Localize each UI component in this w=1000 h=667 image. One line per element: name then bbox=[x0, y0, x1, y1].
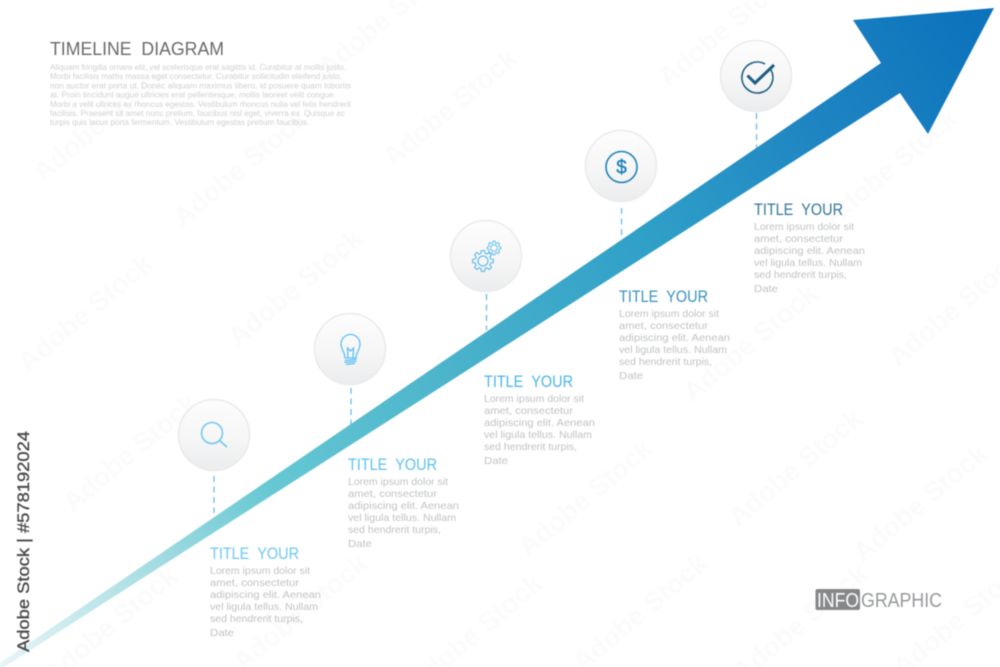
step 5: check: TITLE YOUR bbox=[754, 200, 843, 219]
background watermark: Adobe Stock bbox=[222, 223, 369, 352]
background watermark: Adobe Stock bbox=[12, 248, 159, 377]
step 1: search: TITLE YOUR bbox=[210, 544, 299, 563]
step 4: money: sed hendrerit turpis, bbox=[619, 356, 712, 368]
background watermark: Adobe Stock bbox=[167, 103, 314, 232]
step 1: search: amet, consectetur bbox=[210, 577, 300, 589]
step 1: search: Lorem ipsum dolor sit bbox=[210, 565, 310, 577]
step 2: idea: vel ligula tellus. Nullam bbox=[348, 512, 456, 524]
step 3: gears: TITLE YOUR bbox=[484, 372, 573, 391]
step 3: gears: Date bbox=[484, 455, 508, 467]
step 1: search: Date bbox=[210, 627, 234, 639]
infographic logo: GRAPHIC bbox=[861, 590, 942, 612]
step 1: search: adipiscing elit. Aenean bbox=[210, 589, 321, 601]
intro paragraph: non auctor erat porta ut. Donec aliquam maximus libero, id posuere quam lobortis bbox=[50, 81, 351, 90]
step 3: gears bbox=[450, 220, 595, 467]
step 5: check: Date bbox=[754, 283, 778, 295]
step 2: idea: Date bbox=[348, 538, 372, 550]
step 5: check: amet, consectetur bbox=[754, 233, 844, 245]
step 5: check bbox=[720, 40, 865, 295]
step 2: idea bbox=[314, 314, 459, 550]
step 1: search: vel ligula tellus. Nullam bbox=[210, 601, 318, 613]
step 2: idea: TITLE YOUR bbox=[348, 455, 437, 474]
infographic logo: INFO bbox=[817, 590, 859, 612]
icon: check mark bbox=[742, 62, 774, 93]
step 4: money: adipiscing elit. Aenean bbox=[619, 332, 730, 344]
step 4: money: TITLE YOUR bbox=[619, 287, 708, 306]
step 3: gears: sed hendrerit turpis, bbox=[484, 441, 577, 453]
intro paragraph: Morbi facilisis mattis massa eget consectetur. Curabitur sollicitudin eleifend justo, bbox=[50, 72, 342, 81]
step 4: money: Lorem ipsum dolor sit bbox=[619, 308, 719, 320]
step 5: check: sed hendrerit turpis, bbox=[754, 269, 847, 281]
intro paragraph: Aliquam fringilla ornare elit, vel scelerisque erat sagittis id. Curabitur at mollis justo. bbox=[50, 63, 346, 72]
background watermark: Adobe Stock bbox=[512, 433, 659, 562]
intro paragraph: turpis quis lacus porta fermentum. Vestibulum egestas pretium faucibus. bbox=[50, 118, 309, 127]
step 5: check: adipiscing elit. Aenean bbox=[754, 245, 865, 257]
title: TIMELINE DIAGRAM bbox=[50, 39, 224, 59]
step 3: gears: adipiscing elit. Aenean bbox=[484, 417, 595, 429]
step 3: gears: Lorem ipsum dolor sit bbox=[484, 393, 584, 405]
icon: light bulb bbox=[341, 334, 360, 364]
step 2: idea: sed hendrerit turpis, bbox=[348, 524, 441, 536]
step 1: search: sed hendrerit turpis, bbox=[210, 613, 303, 625]
background watermark: Adobe Stock bbox=[27, 58, 174, 187]
step 2: idea: adipiscing elit. Aenean bbox=[348, 500, 459, 512]
step 3: gears: amet, consectetur bbox=[484, 405, 574, 417]
intro paragraph: facilisis. Praesent sit amet nunc pretium, faucibus nisl eget, viverra ex. Quisque ac bbox=[50, 109, 345, 118]
background watermark: Adobe Stock bbox=[722, 403, 869, 532]
step 4: money: amet, consectetur bbox=[619, 320, 709, 332]
intro paragraph bbox=[50, 63, 352, 127]
step 3: gears: vel ligula tellus. Nullam bbox=[484, 429, 592, 441]
background watermark: Adobe Stock bbox=[847, 438, 994, 567]
background watermark: Adobe Stock bbox=[377, 43, 524, 172]
step 2: idea: Lorem ipsum dolor sit bbox=[348, 476, 448, 488]
icon: gears bbox=[473, 241, 501, 271]
step 4: money: vel ligula tellus. Nullam bbox=[619, 344, 727, 356]
intro paragraph: Morbi a velit ultrices ex rhoncus egestas. Vestibulum rhoncus nulla vel felis hendrerit bbox=[50, 100, 352, 109]
intro paragraph: at. Proin tincidunt augue ultricies erat pellentesque, mollis laoreet velit congue. bbox=[50, 91, 336, 100]
background watermark: Adobe Stock bbox=[677, 278, 824, 407]
step 4: money bbox=[586, 130, 730, 382]
background watermark: Adobe Stock bbox=[57, 388, 204, 517]
step 1: search bbox=[178, 400, 321, 639]
icon: dollar coin bbox=[606, 152, 637, 182]
background watermark: Adobe Stock bbox=[817, 103, 964, 232]
icon: dollar coin: $ bbox=[616, 158, 627, 178]
step 5: check: Lorem ipsum dolor sit bbox=[754, 221, 854, 233]
step 4: money: Date bbox=[619, 370, 643, 382]
step 2: idea: amet, consectetur bbox=[348, 488, 438, 500]
infographic logo bbox=[816, 589, 942, 612]
stock credit: Adobe Stock | #578192024 bbox=[14, 431, 33, 652]
icon: magnifier bbox=[202, 422, 227, 447]
step 5: check: vel ligula tellus. Nullam bbox=[754, 257, 862, 269]
